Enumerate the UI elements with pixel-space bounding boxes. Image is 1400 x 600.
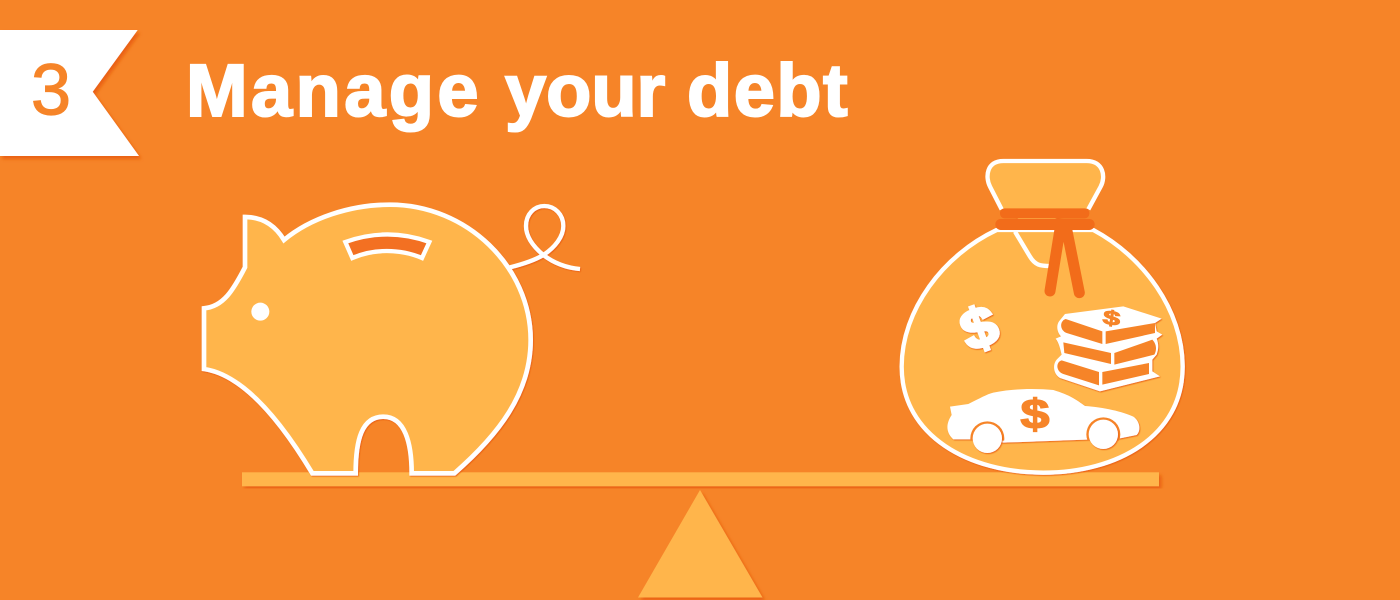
bag ties	[995, 208, 1095, 293]
loose dollar sign: $	[952, 292, 1006, 363]
car	[947, 389, 1139, 455]
coin slot	[345, 234, 429, 258]
pig body	[204, 205, 531, 473]
pig eye	[251, 303, 269, 321]
bag neck	[988, 161, 1103, 267]
car: $	[1021, 391, 1049, 437]
number banner: 3	[31, 50, 71, 130]
number banner	[0, 30, 139, 156]
seesaw fulcrum	[638, 490, 762, 598]
title: Manage	[186, 49, 482, 132]
stack of books	[1054, 306, 1162, 391]
bag body	[902, 230, 1183, 473]
icon: money bag	[902, 161, 1183, 473]
seesaw beam	[242, 472, 1159, 486]
bag fold	[1015, 232, 1050, 266]
pig tail	[510, 206, 580, 269]
title: debt	[687, 49, 849, 132]
icon: piggy bank	[204, 205, 580, 473]
stack of books: $	[1101, 306, 1122, 330]
title: your	[505, 49, 665, 132]
